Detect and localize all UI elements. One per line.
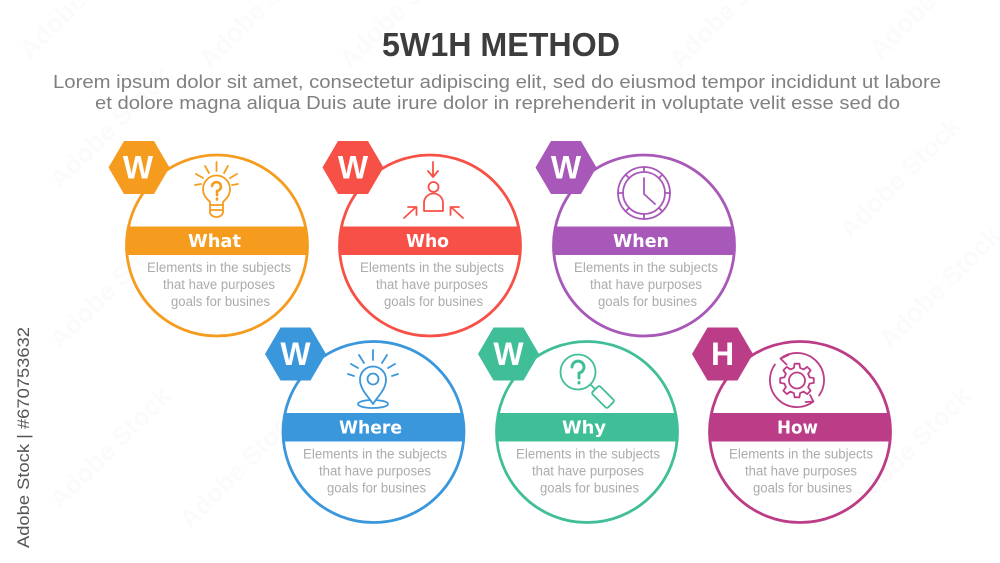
text: Adobe Stock: [43, 220, 177, 354]
description: When: Elements in the subjects: [574, 260, 718, 275]
band: When: [547, 226, 741, 255]
description: When: that have purposes: [590, 277, 702, 292]
band: Why: [490, 413, 684, 442]
text: Adobe Stock: [43, 60, 177, 194]
description: Where: Elements in the subjects: [303, 446, 447, 462]
stock credit: Adobe Stock | #670753632: [14, 327, 33, 548]
hexagon badge: Why: W: [493, 336, 524, 372]
description: Who: [360, 260, 504, 309]
band label: How: How: [777, 418, 818, 438]
description: Why: goals for busines: [540, 480, 639, 496]
description: How: [729, 446, 873, 496]
title: 5W1H METHOD: [382, 26, 620, 63]
description: How: goals for busines: [753, 480, 852, 496]
panel: Where: [265, 328, 471, 522]
panel: How: [692, 328, 897, 522]
subtitle text: Lorem ipsum dolor sit amet, consectetur adipiscing elit, sed do eiusmod tempor incididunt ut labore: [53, 72, 941, 92]
panel: What: [108, 141, 314, 336]
panel: Who: [322, 141, 527, 336]
description: When: [574, 260, 718, 309]
icon: clock: [618, 167, 670, 219]
icon: location pin: [348, 350, 398, 408]
description: Where: goals for busines: [327, 480, 426, 496]
hexagon badge: Who: [322, 141, 384, 194]
hexagon badge: What: [108, 141, 170, 194]
band: Who: [333, 226, 527, 255]
description: What: Elements in the subjects: [147, 260, 291, 275]
icon: gear with cycle arrows: [770, 353, 824, 407]
band label: Where: Where: [339, 418, 402, 438]
text: Adobe Stock: [833, 110, 967, 244]
icon: magnifier with question mark: [560, 354, 615, 409]
subtitle text: et dolore magna aliqua Duis aute irure dolor in reprehenderit in voluptate velit esse sed do: [95, 93, 900, 113]
hexagon badge: What: W: [123, 150, 154, 186]
description: What: goals for busines: [171, 294, 270, 309]
band label: When: When: [613, 231, 669, 252]
band: What: [120, 226, 314, 255]
panel: When: [536, 141, 741, 336]
text: Adobe Stock: [843, 380, 977, 514]
text: Adobe Stock: [173, 400, 307, 534]
band label: Who: Who: [406, 231, 449, 252]
description: Why: that have purposes: [532, 464, 644, 478]
hexagon badge: How: H: [711, 336, 734, 372]
band: How: [703, 413, 897, 442]
description: How: Elements in the subjects: [729, 446, 873, 462]
hexagon badge: How: [692, 328, 753, 380]
description: How: that have purposes: [745, 464, 857, 478]
band label: Why: Why: [562, 418, 606, 438]
description: What: that have purposes: [163, 277, 275, 292]
subtitle text: [53, 72, 941, 113]
panel: Why: [478, 328, 684, 522]
band label: What: What: [188, 231, 241, 252]
description: When: goals for busines: [598, 294, 697, 309]
description: Who: goals for busines: [384, 294, 483, 309]
hexagon badge: Why: [478, 328, 539, 380]
band: Where: [276, 413, 471, 442]
icon: person with arrows: [404, 162, 463, 218]
description: Why: [516, 446, 660, 496]
text: Adobe Stock: [43, 380, 177, 514]
hexagon badge: Who: W: [338, 150, 369, 186]
description: Where: [303, 446, 447, 496]
description: Where: that have purposes: [319, 464, 431, 478]
icon: light bulb with question mark: [195, 162, 238, 217]
description: Why: Elements in the subjects: [516, 446, 660, 462]
description: Who: Elements in the subjects: [360, 260, 504, 275]
hexagon badge: When: [536, 141, 596, 194]
description: What: [147, 260, 291, 309]
hexagon badge: Where: W: [280, 336, 311, 372]
description: Who: that have purposes: [376, 277, 488, 292]
hexagon badge: Where: [265, 328, 326, 380]
hexagon badge: When: W: [551, 150, 582, 186]
